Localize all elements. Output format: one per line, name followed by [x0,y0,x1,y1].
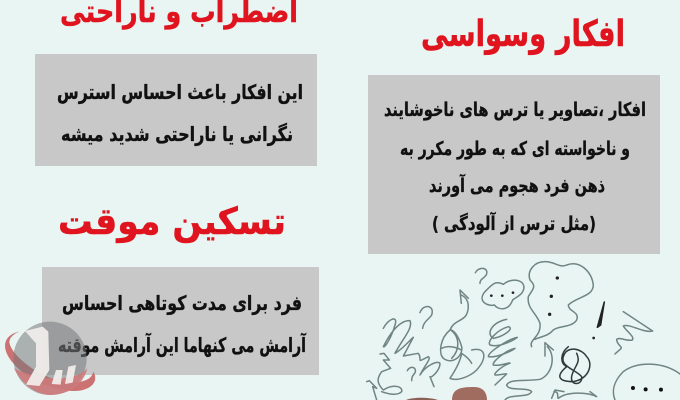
icon: exclamation mark [592,302,604,339]
heading: temporary relief: تسکین موقت [58,200,286,243]
illustration: head at bottom edge [452,387,487,400]
logo: red swoosh [5,332,95,391]
panel: anxiety description [35,54,317,166]
icon: question marks [407,268,487,381]
panel: temporary relief description: آرامش می کنهاما این آرامش موقته [58,332,307,357]
icon: speech bubble [613,364,680,400]
icon: large thought cloud [528,262,593,347]
panel: obsessive thoughts description: (مثل ترس از آلودگی ) [432,211,596,235]
doodle: dark knot [560,347,590,384]
watermark logo [5,322,95,395]
panel: temporary relief description [42,267,319,375]
logo: white letterforms [25,327,76,386]
doodle: scribbles [367,290,653,400]
panel: obsessive thoughts description: ذهن فرد هجوم می آورند [429,173,605,197]
logo: lower red disc [14,368,87,395]
icon: small thought cloud [482,280,524,309]
panel: obsessive thoughts description [368,75,660,254]
illustration: tangled thought doodles [367,262,680,400]
illustration: second head at bottom edge [406,398,438,400]
logo: gray disc [13,322,87,395]
panel: anxiety description: این افکار باعث احساس استرس [57,80,303,104]
panel: anxiety description: نگرانی یا ناراحتی شدید میشه [61,122,293,146]
panel: temporary relief description: فرد برای مدت کوتاهی احساس [62,291,302,315]
